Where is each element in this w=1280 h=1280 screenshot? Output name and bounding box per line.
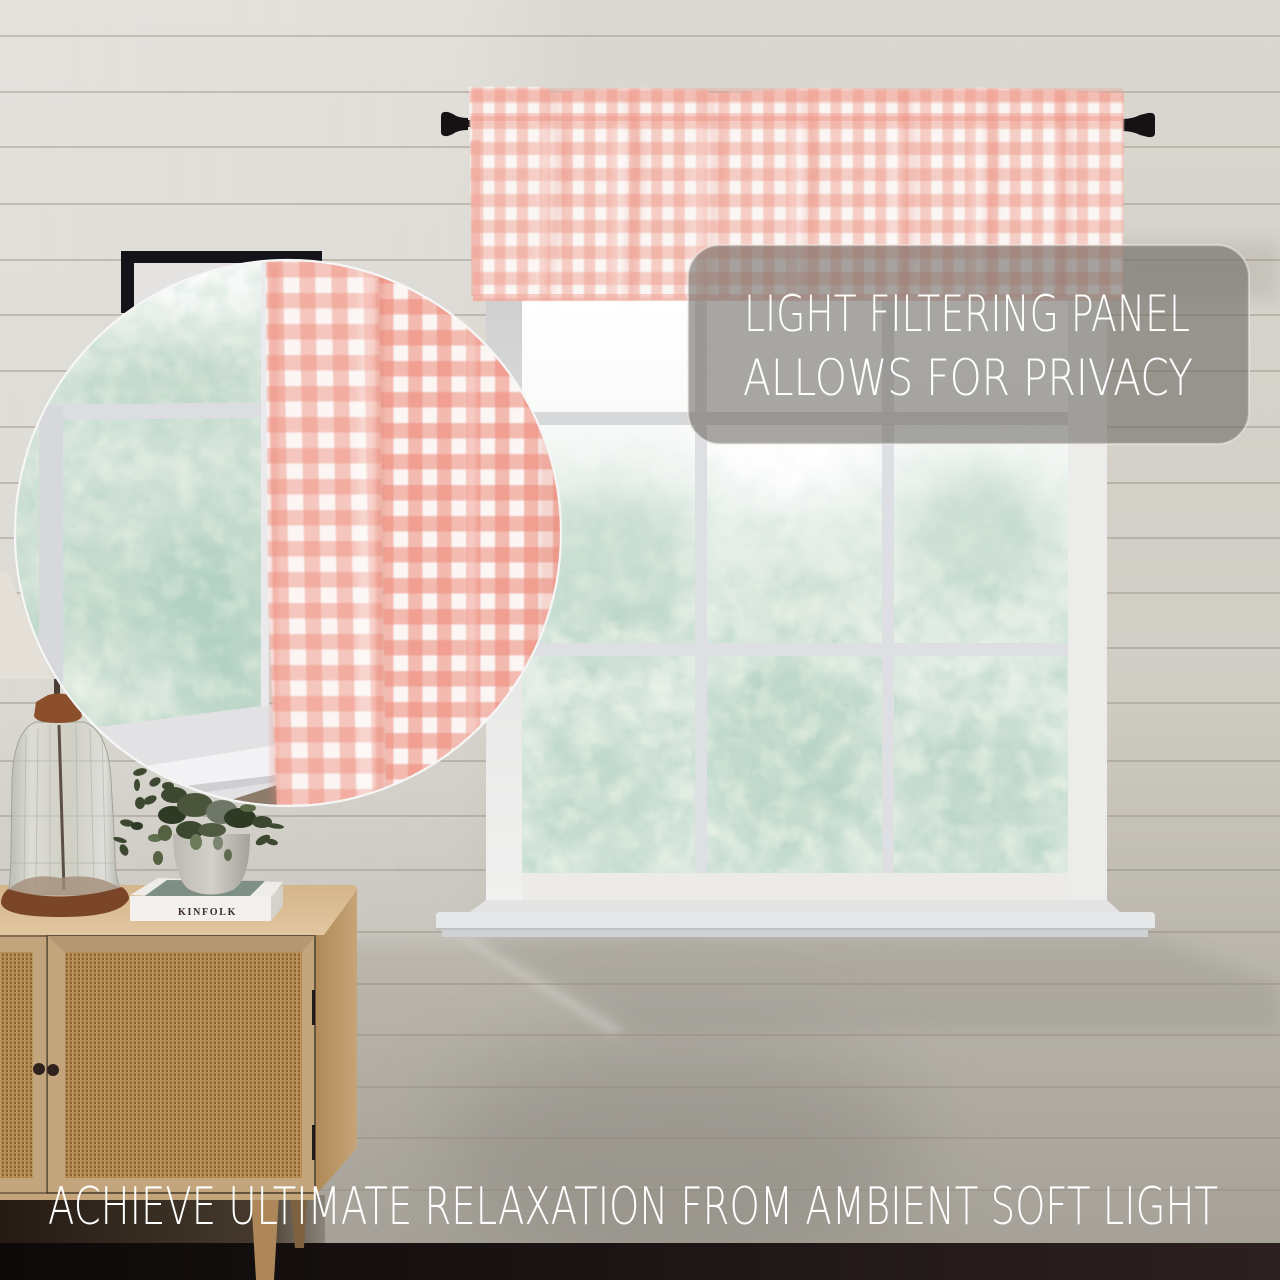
inset curtain left panel xyxy=(266,259,386,810)
under cabinet shadow xyxy=(0,1195,325,1243)
callout text xyxy=(743,285,1193,407)
callout background xyxy=(688,245,1249,444)
lamp wooden base xyxy=(1,887,129,917)
gingham fabric xyxy=(469,87,1124,301)
inset circle border xyxy=(15,260,561,806)
callout panel xyxy=(688,245,1249,444)
lamp stem xyxy=(54,679,60,701)
floor xyxy=(0,1243,1280,1280)
inset window mullions xyxy=(39,259,277,810)
plant leaves xyxy=(113,767,284,865)
inset curtain fold shading xyxy=(270,265,565,805)
lamp glass body xyxy=(8,722,122,895)
inset window view xyxy=(15,255,270,739)
cabinet knobs xyxy=(33,1063,59,1076)
view of trees through glass xyxy=(522,300,1068,873)
wooden sideboard xyxy=(0,885,357,1280)
valance curtain xyxy=(441,87,1155,301)
lamp shade xyxy=(0,572,53,679)
book title: KINFOLK xyxy=(178,907,237,918)
window xyxy=(436,296,1155,937)
potted plant xyxy=(113,767,284,894)
callout text: ALLOWS FOR PRIVACY xyxy=(743,349,1193,407)
window muntins xyxy=(522,300,1068,873)
cabinet top xyxy=(0,885,357,935)
table lamp xyxy=(0,572,129,917)
magnified circle inset xyxy=(15,255,565,810)
book xyxy=(130,878,283,921)
cabinet front xyxy=(0,935,316,1200)
curtain rod finials xyxy=(441,112,1155,137)
cabinet side xyxy=(316,888,357,1195)
pleats and rod pocket xyxy=(471,88,1123,301)
right cabinet door xyxy=(47,936,315,1193)
cabinet legs xyxy=(251,1195,307,1280)
lamp wooden cap xyxy=(34,694,82,723)
plant pot xyxy=(173,834,250,894)
window sill xyxy=(436,900,1155,937)
left cabinet door xyxy=(0,936,47,1193)
inset curtain right panel xyxy=(379,275,565,810)
lamp glass ribs xyxy=(11,725,118,885)
framed picture xyxy=(121,251,322,313)
window frame xyxy=(486,296,1107,912)
